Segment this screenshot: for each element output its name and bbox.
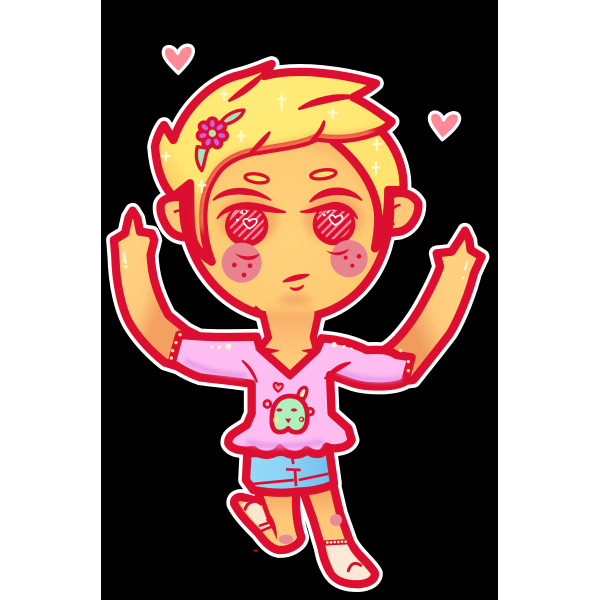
left ear (161, 197, 195, 237)
left eye (213, 189, 285, 247)
sleeve and hem shading (185, 360, 402, 446)
left leg and sock (234, 488, 301, 550)
hair clip leaves (196, 110, 244, 171)
shoulder highlights (210, 342, 353, 350)
hair (155, 64, 392, 262)
stray red speck (254, 550, 257, 552)
armpit folds (243, 361, 350, 382)
hair underside shading (203, 133, 373, 230)
head (155, 64, 418, 375)
under-lip shadow (279, 295, 311, 305)
hair strand lines (229, 73, 355, 153)
white sticker outline (114, 64, 482, 584)
left cheek blush (222, 243, 262, 283)
right arm with raised finger (383, 231, 482, 383)
denim shorts (246, 450, 334, 493)
heart: top right (427, 110, 460, 141)
right leg and sock (303, 485, 375, 584)
neck with V collar (253, 300, 335, 375)
pink shirt (170, 333, 412, 455)
shirt print: green creature (264, 387, 313, 432)
left forehead mark (245, 172, 269, 184)
right forehead mark (310, 168, 336, 180)
right cheek blush (326, 240, 368, 277)
mouth (283, 275, 309, 290)
hair clip flower (196, 116, 229, 149)
sleeve cuff ruffles (170, 333, 410, 372)
face (183, 133, 390, 318)
eye shadows (219, 194, 363, 244)
hair sparkles (163, 90, 381, 192)
right ear (387, 193, 418, 233)
shirt print: small heart (274, 383, 283, 392)
left arm with raised finger (114, 211, 200, 368)
right hair lock (333, 127, 404, 248)
heart: top left (163, 45, 193, 73)
right eye (301, 188, 362, 245)
background: black panel (101, 0, 498, 600)
